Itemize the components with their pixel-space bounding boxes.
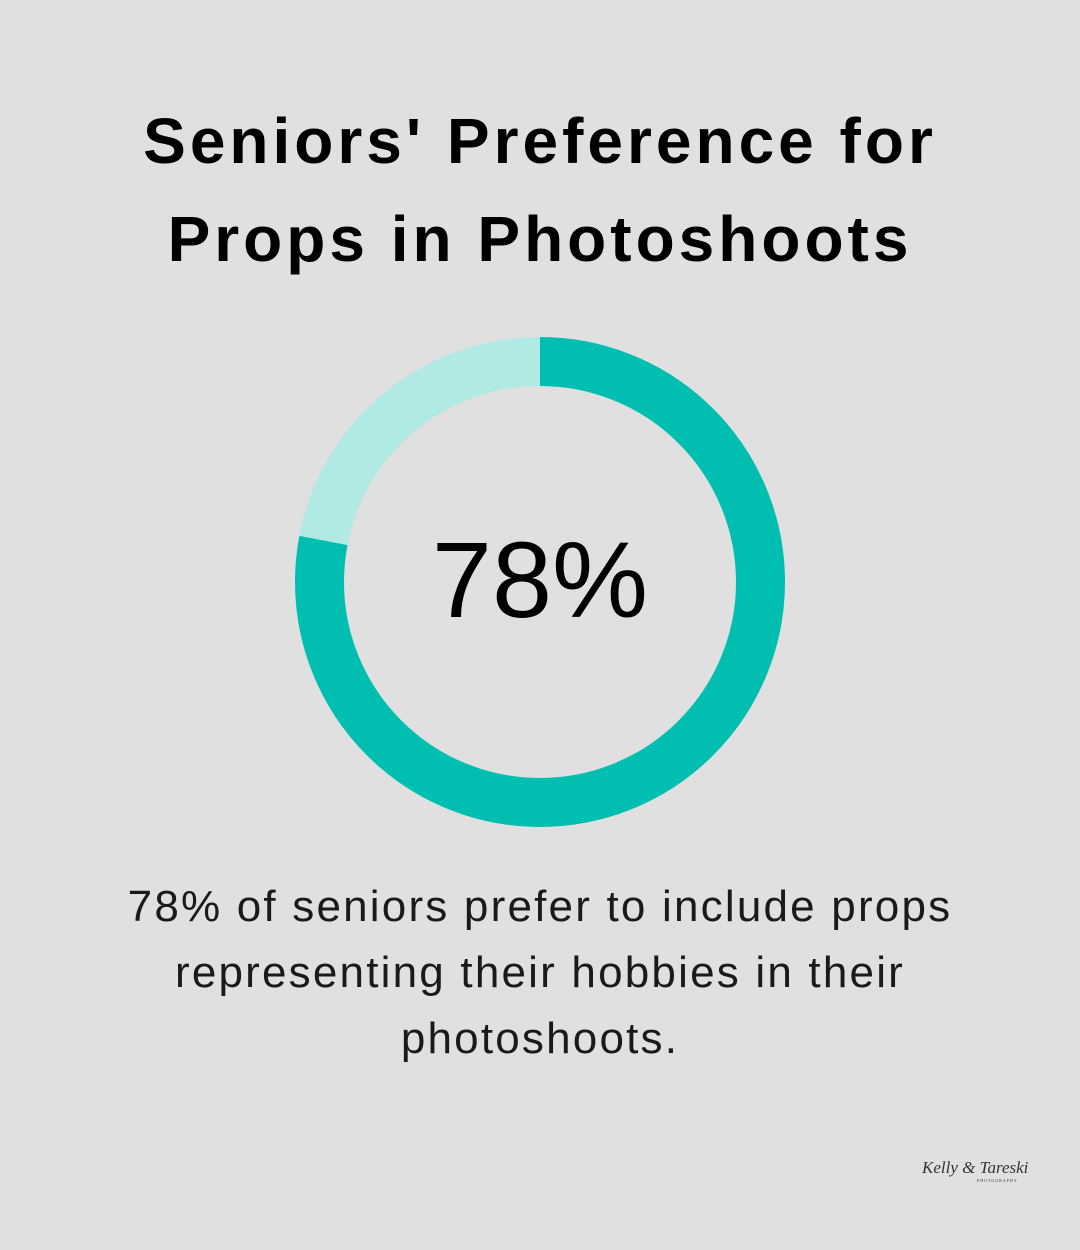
title bbox=[143, 105, 937, 275]
title: Seniors' Preference for bbox=[143, 105, 937, 177]
description text: photoshoots. bbox=[401, 1014, 679, 1063]
logo signature: Kelly & Tareski bbox=[922, 1158, 1028, 1177]
description text bbox=[128, 882, 952, 1063]
description text: representing their hobbies in their bbox=[175, 948, 905, 997]
78% segment bbox=[320, 362, 760, 802]
description text: 78% of seniors prefer to include props bbox=[128, 882, 952, 931]
title: Props in Photoshoots bbox=[168, 203, 912, 275]
remaining segment bbox=[320, 362, 760, 802]
center value: 78% bbox=[432, 519, 648, 640]
logo signature: PHOTOGRAPHY bbox=[977, 1178, 1018, 1183]
